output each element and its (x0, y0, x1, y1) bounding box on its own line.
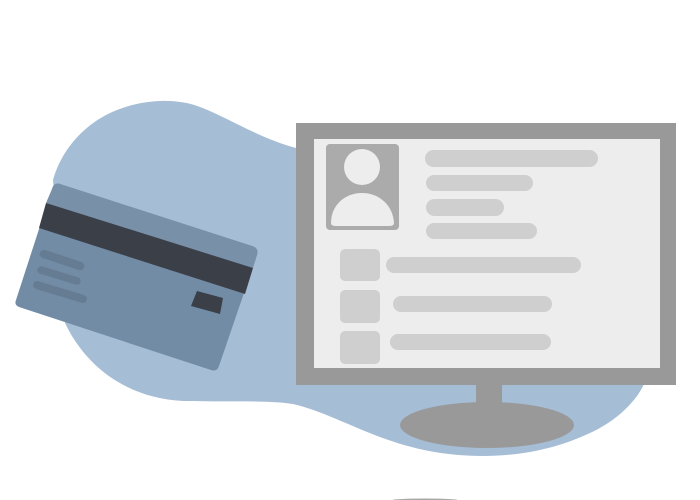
credit card (15, 184, 257, 370)
card body (15, 184, 257, 370)
profile text lines (425, 150, 598, 239)
list row 2 (340, 290, 552, 323)
list row 3 (340, 331, 551, 364)
monitor frame (296, 123, 676, 385)
card top band (46, 184, 257, 268)
photo frame (326, 144, 399, 230)
avatar body (331, 193, 394, 226)
profile photo (326, 144, 399, 230)
monitor screen (314, 139, 660, 368)
magnetic stripe (39, 203, 253, 294)
monitor (296, 123, 676, 448)
monitor base (400, 402, 574, 448)
card chip (191, 291, 223, 314)
list rows (340, 249, 581, 364)
list row 1 (340, 249, 581, 281)
signature lines (37, 254, 83, 299)
bottom edge shadow (393, 498, 457, 500)
avatar head (344, 149, 380, 185)
monitor stand neck (476, 380, 502, 410)
background blob (53, 101, 644, 456)
